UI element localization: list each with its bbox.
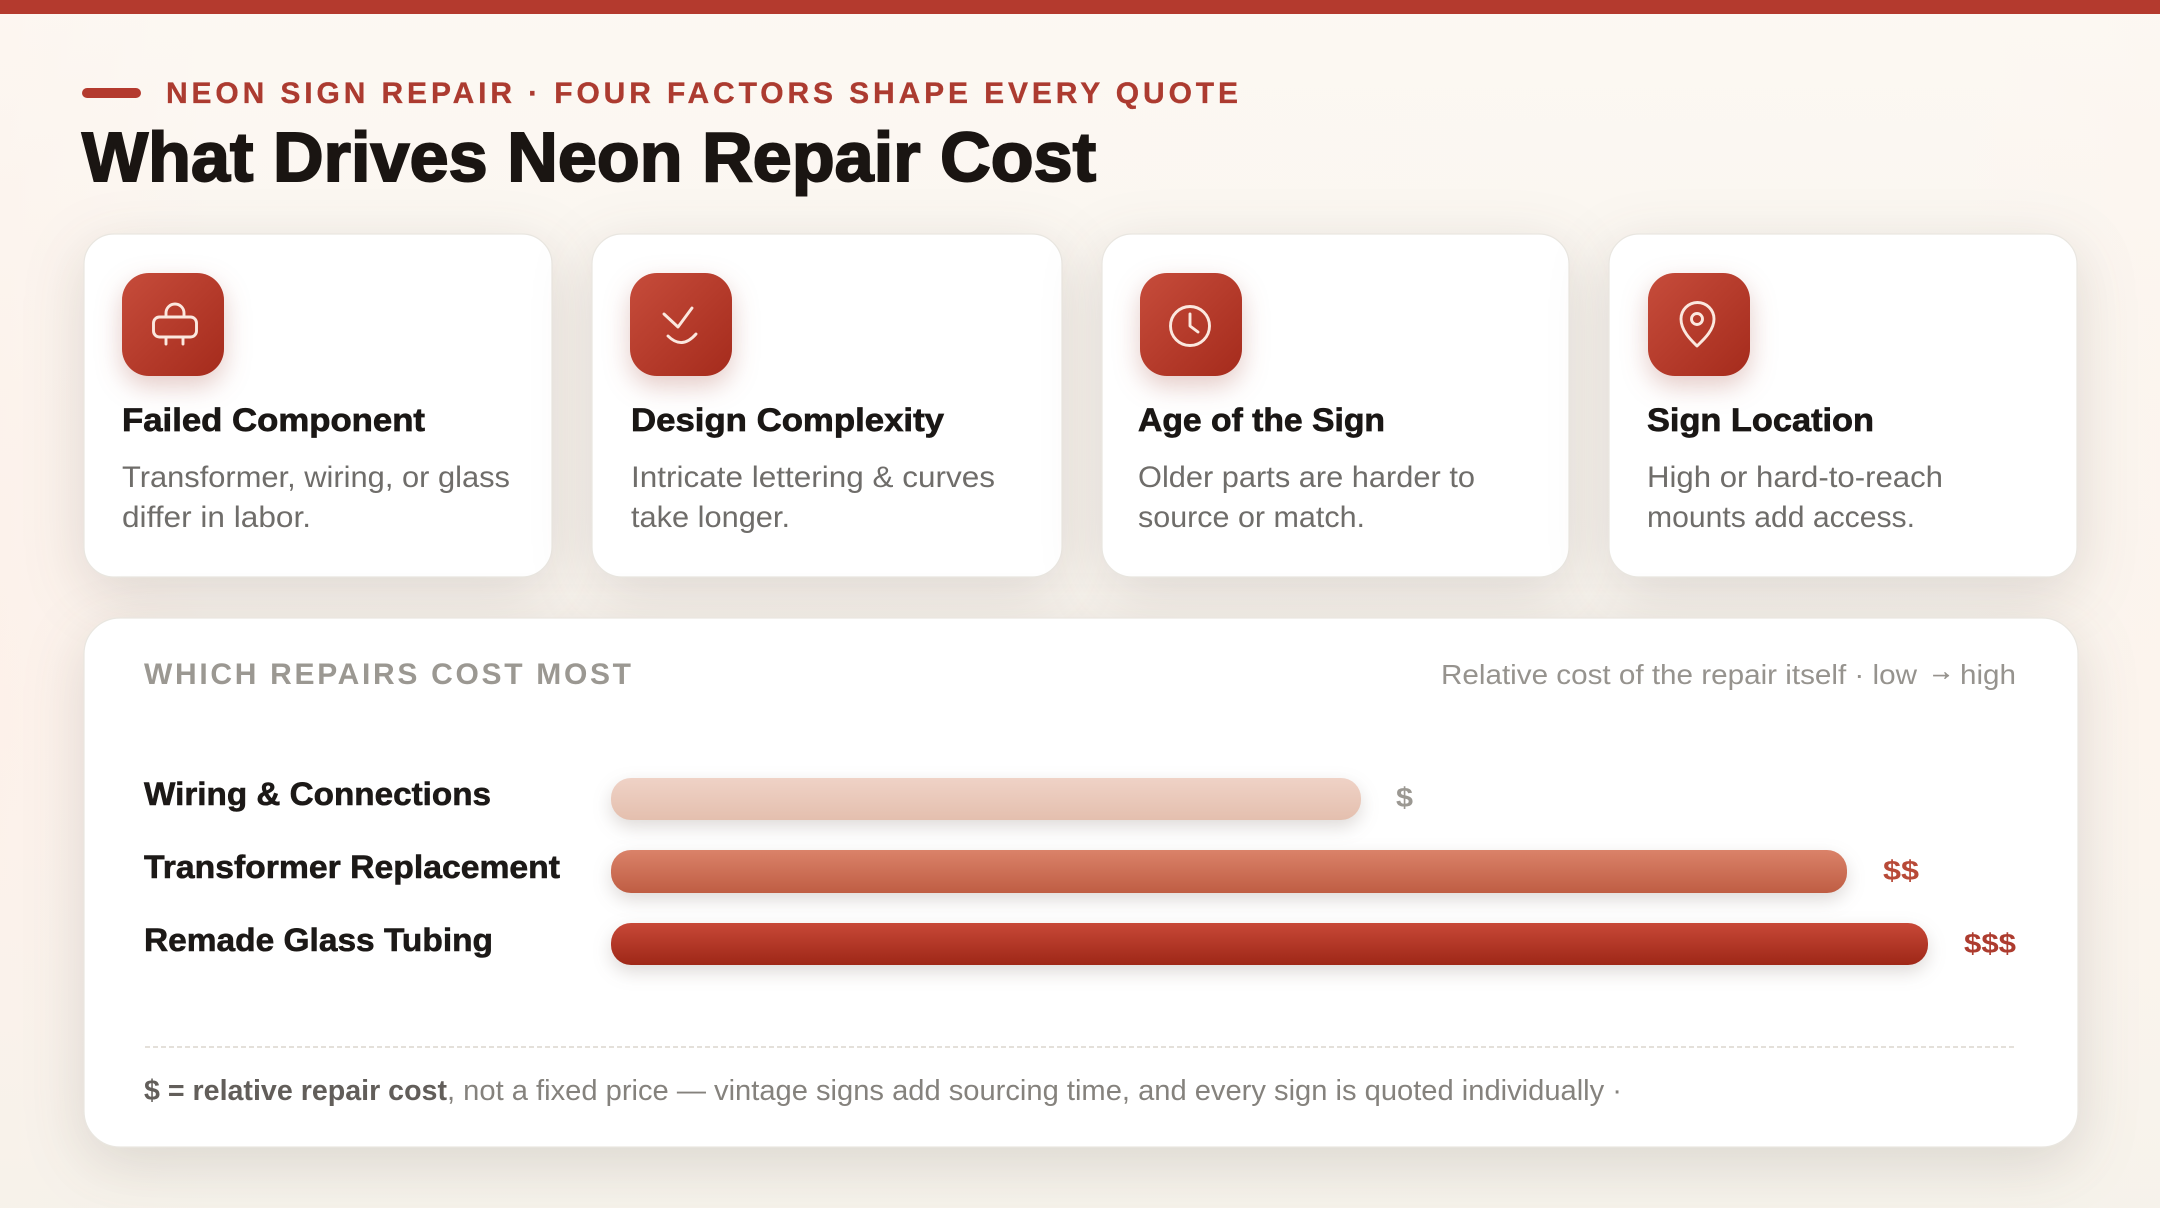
panel: sign location [1609,234,2077,577]
row: transformer replacement: $$ [1883,855,1919,886]
panel heading: WHICH REPAIRS COST MOST [144,658,631,691]
bar chart [144,776,2016,965]
panel: design complexity [592,234,1062,577]
heading: Sign Location [1647,402,1874,438]
description: source or match. [1138,501,1365,534]
scale note: Relative cost of the repair itself · low [1441,659,1918,690]
row: transformer replacement [144,849,1919,893]
row: wiring and connections [144,776,1413,820]
row: wiring and connections: Wiring & Connections [144,776,491,812]
panel: which repairs cost most [84,618,2078,1147]
description [122,461,510,534]
description: Older parts are harder to [1138,461,1475,494]
top accent bar [0,0,2160,14]
description: take longer. [631,501,790,534]
heading: Age of the Sign [1138,402,1385,438]
scale note: high [1960,659,2016,690]
description: High or hard-to-reach [1647,461,1943,494]
description [1647,461,1943,534]
eyebrow [82,77,1238,110]
icon: clock [1140,273,1242,376]
description: differ in labor. [122,501,311,534]
scale note: → [1928,656,1954,686]
icon: map pin [1648,273,1750,376]
eyebrow text: NEON SIGN REPAIR · FOUR FACTORS SHAPE EVERY QUOTE [166,77,1238,110]
footnote: , not a fixed price — vintage signs add sourcing time, and every sign is quoted individually · [447,1075,1622,1107]
description [1138,461,1475,534]
description: Intricate lettering & curves [631,461,995,494]
title: What Drives Neon Repair Cost [82,118,1096,196]
icon: neon curves [630,273,732,376]
row: wiring and connections: $ [1396,782,1413,813]
footnote: $ = relative repair cost [144,1075,447,1107]
description: Transformer, wiring, or glass [122,461,510,494]
row: remade glass tubing: $$$ [1964,928,2016,959]
eyebrow dash [82,88,141,98]
panel: failed component [84,234,552,577]
heading: Design Complexity [631,402,944,438]
icon: transformer [122,273,224,376]
row: transformer replacement: Transformer Replacement [144,849,560,885]
panel: age of the sign [1102,234,1569,577]
heading: Failed Component [122,402,425,438]
row: remade glass tubing: Remade Glass Tubing [144,922,493,958]
row: remade glass tubing [144,922,2016,965]
description [631,461,995,534]
description: mounts add access. [1647,501,1915,534]
